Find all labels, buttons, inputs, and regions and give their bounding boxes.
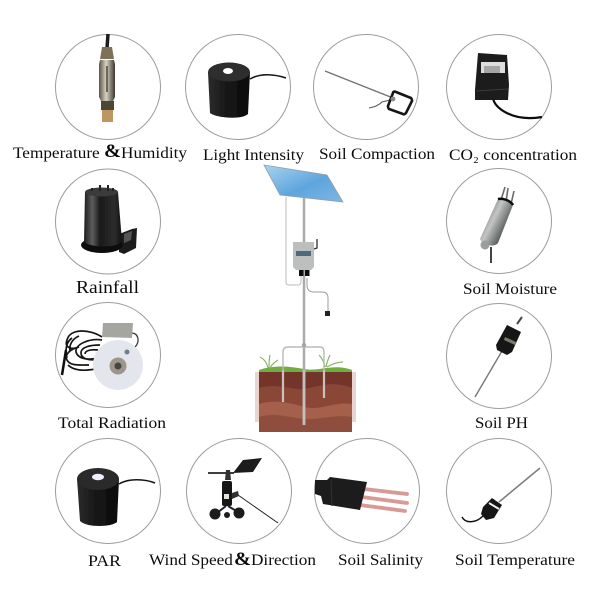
panel: temperature and humidity sensor <box>56 34 160 140</box>
panel: total radiation sensor <box>56 302 160 408</box>
data logger box <box>293 239 317 276</box>
icon: soil moisture probe <box>480 187 514 263</box>
label: temperature and humidity: Temperature <box>13 145 94 162</box>
icon: soil temperature probe <box>462 468 540 522</box>
icon: total radiation sensor <box>62 323 143 390</box>
external plug <box>325 311 330 316</box>
label: soil salinity: Soil Salinity <box>338 552 423 569</box>
icon: light intensity cylinder sensor <box>208 62 286 118</box>
icon: PAR cylinder sensor <box>77 468 155 526</box>
panel: PAR sensor <box>56 438 160 544</box>
label: soil compaction: Soil Compaction <box>319 146 435 163</box>
panel: soil temperature sensor <box>446 438 552 544</box>
label: CO2 concentration: CO₂ concentration <box>449 147 577 164</box>
icon: soil pH probe <box>475 317 522 397</box>
label: total radiation: Total Radiation <box>58 415 166 432</box>
mast junction <box>302 343 306 347</box>
label: soil pH: Soil PH <box>475 415 528 432</box>
label: rainfall: Rainfall <box>76 277 139 297</box>
mast and wiring <box>283 197 328 425</box>
central solar-powered monitoring station <box>255 165 356 432</box>
icon: wind vane and anemometer <box>208 458 278 523</box>
panel: rainfall sensor <box>56 169 160 274</box>
panel: CO2 concentration sensor <box>446 34 552 140</box>
solar panel <box>264 165 343 202</box>
panel: soil pH sensor <box>446 304 552 408</box>
label: light intensity: Light Intensity <box>203 147 304 164</box>
label: temperature and humidity: Humidity <box>121 145 187 162</box>
label: soil moisture: Soil Moisture <box>463 281 557 298</box>
panel: soil compaction sensor <box>314 34 418 140</box>
panel: light intensity sensor <box>186 34 290 140</box>
icon: rain gauge <box>81 185 137 254</box>
label: soil temperature: Soil Temperature <box>455 552 575 569</box>
soil block <box>255 370 356 432</box>
label: wind speed and direction: Wind Speed &Direction <box>149 549 316 570</box>
panel: soil salinity sensor <box>314 438 420 544</box>
label: PAR: PAR <box>88 553 121 570</box>
icon: soil compaction penetrometer <box>325 71 412 114</box>
icon: CO2 sensor box <box>475 53 542 118</box>
panel: wind speed and direction sensor <box>186 438 292 544</box>
icon: temperature and humidity probe <box>99 34 115 122</box>
panel: soil moisture sensor <box>446 168 552 274</box>
label: temperature and humidity: & <box>104 141 121 162</box>
icon: soil salinity probe <box>315 477 407 511</box>
grass <box>259 355 352 372</box>
